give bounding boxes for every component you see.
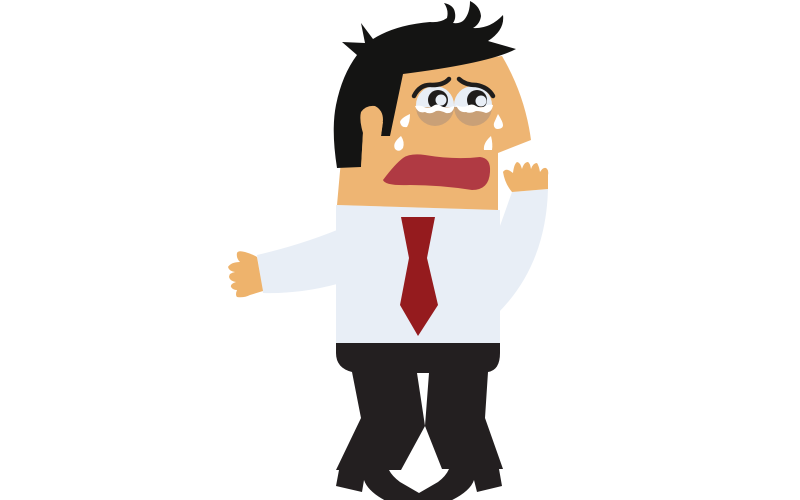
- eyes: [415, 86, 493, 126]
- shirt torso: [336, 205, 500, 343]
- trousers and shoes: [336, 343, 503, 500]
- right eye: [454, 86, 493, 126]
- right hand: [503, 162, 548, 192]
- left hand: [228, 251, 263, 297]
- mouth: [383, 154, 490, 190]
- ear: [360, 106, 383, 168]
- left eyebrow: [414, 79, 449, 96]
- right arm sleeve: [495, 189, 548, 313]
- right eyebrow: [459, 79, 493, 96]
- head: [337, 56, 531, 210]
- left eye: [415, 86, 454, 126]
- left arm sleeve: [257, 230, 337, 293]
- tears: [394, 114, 503, 151]
- hair: [334, 1, 516, 168]
- necktie: [400, 217, 438, 336]
